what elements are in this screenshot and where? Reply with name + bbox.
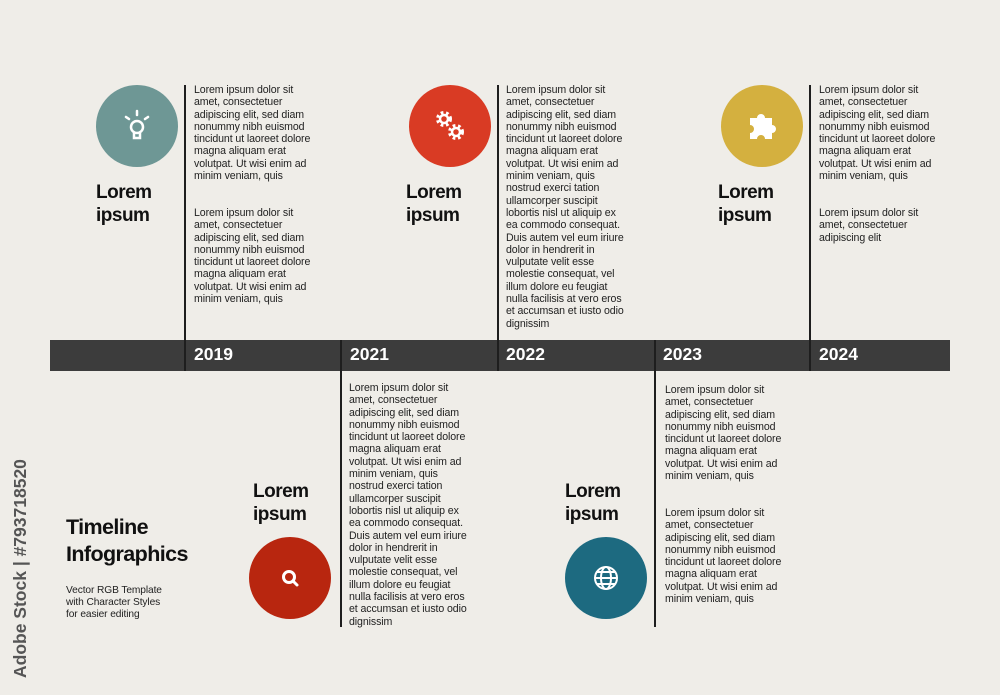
title: Timeline bbox=[66, 515, 148, 539]
text: 2021: et accumsan et iusto odio bbox=[349, 603, 467, 615]
icon: puzzle bbox=[721, 85, 803, 167]
text: 2022: ea commodo consequat. bbox=[506, 219, 620, 231]
text: 2019: tincidunt ut laoreet dolore bbox=[194, 133, 310, 145]
text: 2021: magna aliquam erat bbox=[349, 443, 441, 455]
text: 2021: Lorem ipsum dolor sit bbox=[349, 382, 448, 394]
text: 2019: nonummy nibh euismod bbox=[194, 244, 304, 256]
text: 2019: magna aliquam erat bbox=[194, 268, 286, 280]
text: 2023: nonummy nibh euismod bbox=[665, 544, 775, 556]
text: 2021: amet, consectetuer bbox=[349, 394, 437, 406]
heading: 2024: Lorem bbox=[718, 182, 774, 203]
text: 2024: Lorem ipsum dolor sit bbox=[819, 207, 918, 219]
text: 2023: nonummy nibh euismod bbox=[665, 421, 775, 433]
heading: 2022 bbox=[406, 182, 462, 226]
text: 2019: amet, consectetuer bbox=[194, 96, 282, 108]
text: 2022: minim veniam, quis bbox=[506, 170, 595, 182]
subtitle: Vector RGB Template bbox=[66, 585, 162, 596]
text: 2024: adipiscing elit bbox=[819, 232, 881, 244]
heading: 2021: Lorem bbox=[253, 481, 309, 502]
text: 2019: nonummy nibh euismod bbox=[194, 121, 304, 133]
year labels: 2023 bbox=[663, 344, 702, 364]
text: 2022: lobortis nisl ut aliquip ex bbox=[506, 207, 616, 219]
text: 2021: illum dolore eu feugiat bbox=[349, 579, 450, 591]
text: 2023: tincidunt ut laoreet dolore bbox=[665, 433, 781, 445]
text: 2024: magna aliquam erat bbox=[819, 145, 911, 157]
text: 2022: magna aliquam erat bbox=[506, 145, 598, 157]
text: 2023: adipiscing elit, sed diam bbox=[665, 532, 775, 544]
text: 2021: dolor in hendrerit in bbox=[349, 542, 438, 554]
heading: 2019 bbox=[96, 182, 152, 226]
text: 2021: lobortis nisl ut aliquip ex bbox=[349, 505, 459, 517]
text: 2022: dignissim bbox=[506, 318, 549, 330]
text: 2022: volutpat. Ut wisi enim ad bbox=[506, 158, 618, 170]
text: 2022: vulputate velit esse bbox=[506, 256, 594, 268]
heading: 2021: ipsum bbox=[253, 504, 306, 525]
text: 2023: volutpat. Ut wisi enim ad bbox=[665, 458, 777, 470]
title: Infographics bbox=[66, 542, 188, 566]
heading: 2019: ipsum bbox=[96, 205, 149, 226]
text: 2022: adipiscing elit, sed diam bbox=[506, 109, 616, 121]
heading: 2023 bbox=[565, 481, 621, 525]
year labels: 2022 bbox=[506, 344, 545, 364]
heading: 2024: ipsum bbox=[718, 205, 771, 226]
text: 2019: magna aliquam erat bbox=[194, 145, 286, 157]
heading: 2021 bbox=[253, 481, 309, 525]
title bbox=[66, 515, 188, 566]
icon: lightbulb bbox=[96, 85, 178, 167]
text: 2021: minim veniam, quis bbox=[349, 468, 438, 480]
text: 2021: adipiscing elit, sed diam bbox=[349, 407, 459, 419]
year labels: 2019 bbox=[194, 344, 233, 364]
text: 2022: dolor in hendrerit in bbox=[506, 244, 595, 256]
text: 2019: volutpat. Ut wisi enim ad bbox=[194, 158, 306, 170]
text: 2023: minim veniam, quis bbox=[665, 470, 754, 482]
text: 2021: molestie consequat, vel bbox=[349, 566, 457, 578]
text: 2024: amet, consectetuer bbox=[819, 219, 907, 231]
text: 2021: Duis autem vel eum iriure bbox=[349, 530, 467, 542]
text: 2021: ullamcorper suscipit bbox=[349, 493, 441, 505]
text: 2023: tincidunt ut laoreet dolore bbox=[665, 556, 781, 568]
heading: 2023: Lorem bbox=[565, 481, 621, 502]
text: 2021: nostrud exerci tation bbox=[349, 480, 442, 492]
text: 2022 bbox=[506, 84, 624, 330]
text: 2022: ullamcorper suscipit bbox=[506, 195, 598, 207]
text: 2024: adipiscing elit, sed diam bbox=[819, 109, 929, 121]
text: 2022: illum dolore eu feugiat bbox=[506, 281, 607, 293]
watermark id: Adobe Stock | #793718520 bbox=[10, 459, 30, 678]
text: 2021: volutpat. Ut wisi enim ad bbox=[349, 456, 461, 468]
text: 2019: tincidunt ut laoreet dolore bbox=[194, 256, 310, 268]
subtitle bbox=[66, 585, 162, 620]
text: 2022: Lorem ipsum dolor sit bbox=[506, 84, 605, 96]
text: 2023: amet, consectetuer bbox=[665, 519, 753, 531]
text: 2023: adipiscing elit, sed diam bbox=[665, 409, 775, 421]
text: 2021 bbox=[349, 382, 467, 628]
text: 2021: nonummy nibh euismod bbox=[349, 419, 459, 431]
text: 2019: Lorem ipsum dolor sit bbox=[194, 84, 293, 96]
year labels: 2021 bbox=[350, 344, 389, 364]
icon: search bbox=[249, 537, 331, 619]
text: 2024: nonummy nibh euismod bbox=[819, 121, 929, 133]
text: 2022: nulla facilisis at vero eros bbox=[506, 293, 622, 305]
text: 2023 bbox=[665, 384, 781, 605]
text: 2021: dignissim bbox=[349, 616, 392, 628]
text: 2023: Lorem ipsum dolor sit bbox=[665, 507, 764, 519]
year labels bbox=[194, 344, 858, 364]
text: 2021: ea commodo consequat. bbox=[349, 517, 463, 529]
timeline bar bbox=[50, 340, 950, 371]
text: 2022: Duis autem vel eum iriure bbox=[506, 232, 624, 244]
text: 2024 bbox=[819, 84, 935, 244]
heading: 2019: Lorem bbox=[96, 182, 152, 203]
text: 2021: nulla facilisis at vero eros bbox=[349, 591, 465, 603]
heading: 2024 bbox=[718, 182, 774, 226]
text: 2021: tincidunt ut laoreet dolore bbox=[349, 431, 465, 443]
heading: 2022: Lorem bbox=[406, 182, 462, 203]
text: 2023: amet, consectetuer bbox=[665, 396, 753, 408]
text: 2022: et accumsan et iusto odio bbox=[506, 305, 624, 317]
subtitle: for easier editing bbox=[66, 609, 140, 620]
text: 2024: minim veniam, quis bbox=[819, 170, 908, 182]
text: 2019: Lorem ipsum dolor sit bbox=[194, 207, 293, 219]
text: 2022: amet, consectetuer bbox=[506, 96, 594, 108]
text: 2023: magna aliquam erat bbox=[665, 568, 757, 580]
icon: globe bbox=[565, 537, 647, 619]
text: 2022: nostrud exerci tation bbox=[506, 182, 599, 194]
text: 2024: tincidunt ut laoreet dolore bbox=[819, 133, 935, 145]
subtitle: with Character Styles bbox=[66, 597, 160, 608]
text: 2023: volutpat. Ut wisi enim ad bbox=[665, 581, 777, 593]
text: 2021: vulputate velit esse bbox=[349, 554, 437, 566]
text: 2023: magna aliquam erat bbox=[665, 445, 757, 457]
text: 2019: adipiscing elit, sed diam bbox=[194, 109, 304, 121]
text: 2023: Lorem ipsum dolor sit bbox=[665, 384, 764, 396]
text: 2022: nonummy nibh euismod bbox=[506, 121, 616, 133]
text: 2019: minim veniam, quis bbox=[194, 170, 283, 182]
icon: gears bbox=[409, 85, 491, 167]
text: 2019: volutpat. Ut wisi enim ad bbox=[194, 281, 306, 293]
text: 2019: adipiscing elit, sed diam bbox=[194, 232, 304, 244]
heading: 2022: ipsum bbox=[406, 205, 459, 226]
text: 2019: amet, consectetuer bbox=[194, 219, 282, 231]
text: 2022: tincidunt ut laoreet dolore bbox=[506, 133, 622, 145]
year labels: 2024 bbox=[819, 344, 858, 364]
heading: 2023: ipsum bbox=[565, 504, 618, 525]
text: 2019: minim veniam, quis bbox=[194, 293, 283, 305]
text: 2019 bbox=[194, 84, 310, 305]
text: 2022: molestie consequat, vel bbox=[506, 268, 614, 280]
text: 2024: amet, consectetuer bbox=[819, 96, 907, 108]
text: 2023: minim veniam, quis bbox=[665, 593, 754, 605]
text: 2024: volutpat. Ut wisi enim ad bbox=[819, 158, 931, 170]
text: 2024: Lorem ipsum dolor sit bbox=[819, 84, 918, 96]
